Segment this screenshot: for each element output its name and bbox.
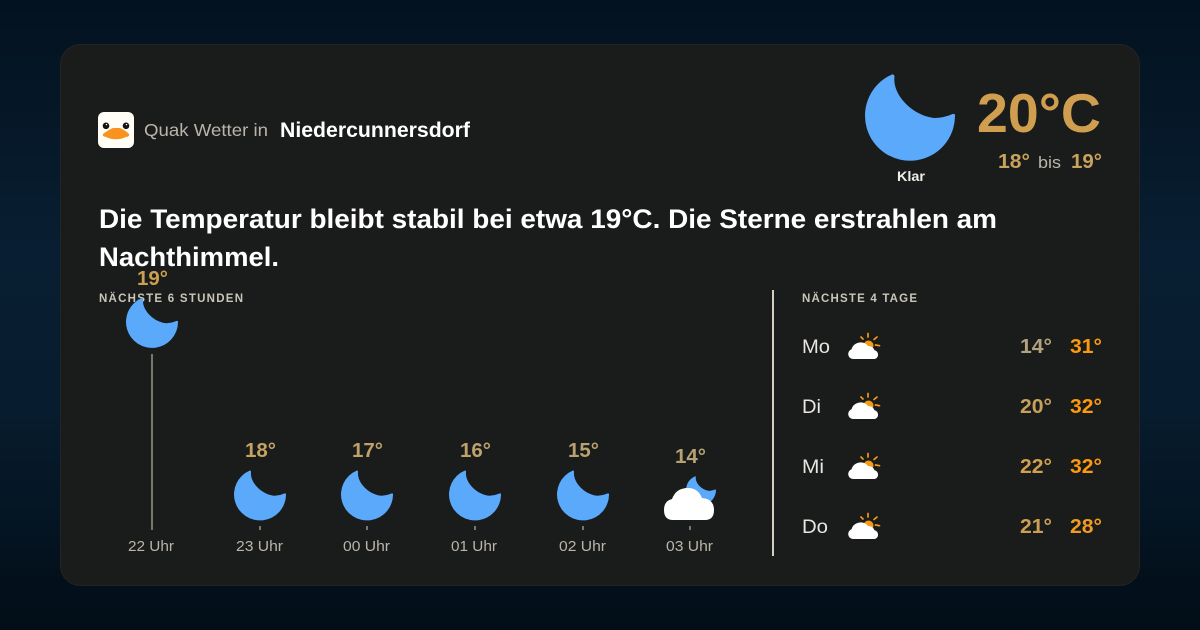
icon: current moon — [865, 74, 955, 161]
condition label: Klar — [897, 168, 926, 184]
temperature range — [998, 151, 1102, 173]
headline summary: Nachthimmel. — [99, 242, 279, 272]
hour 03: 03 Uhr — [666, 539, 713, 555]
location name: Niedercunnersdorf — [280, 119, 471, 142]
temperature range: 19° — [1071, 151, 1102, 173]
heading: next 4 days: NÄCHSTE 4 TAGE — [802, 292, 917, 305]
day: Tuesday: Di — [802, 397, 821, 418]
hour 22: 22 Uhr — [128, 539, 174, 555]
hour 03 — [664, 446, 716, 555]
day: Monday: 14° — [1020, 336, 1052, 358]
hour 00 — [341, 440, 393, 555]
heading: next 6 hours: NÄCHSTE 6 STUNDEN — [99, 292, 243, 305]
hour 02: 02 Uhr — [559, 539, 606, 555]
brand label: Quak Wetter in — [144, 120, 268, 140]
day: Thursday — [802, 514, 1102, 539]
headline summary — [99, 204, 997, 272]
day: Monday: Mo — [802, 337, 830, 358]
temperature range: bis — [1038, 153, 1061, 172]
hour 01: 01 Uhr — [451, 539, 497, 555]
hour 01: 16° — [460, 440, 491, 462]
day: Wednesday: 22° — [1020, 456, 1052, 478]
day: Thursday: 21° — [1020, 516, 1052, 538]
hour 23: 18° — [245, 440, 276, 462]
headline summary: Die Temperatur bleibt stabil bei etwa 19°C. Die Sterne erstrahlen am — [99, 204, 997, 234]
day: Tuesday — [802, 394, 1102, 419]
hour 00: 00 Uhr — [343, 539, 390, 555]
day: Tuesday: 20° — [1020, 396, 1052, 418]
day: Wednesday: Mi — [802, 457, 824, 478]
day: Thursday: 28° — [1070, 516, 1102, 538]
logo: duck icon — [98, 112, 134, 148]
hour 22 — [126, 268, 178, 555]
hour 03: 14° — [675, 446, 706, 468]
hour 02: 15° — [568, 440, 599, 462]
hour 01 — [449, 440, 501, 555]
divider — [772, 290, 774, 556]
chart: hourly forecast — [126, 268, 716, 555]
day: Wednesday — [802, 454, 1102, 479]
day: Monday — [802, 334, 1102, 359]
hour 00: 17° — [352, 440, 383, 462]
day: Thursday: Do — [802, 517, 828, 538]
day: Wednesday: 32° — [1070, 456, 1102, 478]
list: daily forecast — [802, 334, 1102, 539]
temperature range: 18° — [998, 151, 1030, 173]
hour 23 — [234, 440, 286, 555]
current temperature: 20°C — [977, 82, 1101, 144]
hour 23: 23 Uhr — [236, 539, 283, 555]
panel: weather card — [60, 44, 1140, 586]
day: Monday: 31° — [1070, 336, 1102, 358]
day: Tuesday: 32° — [1070, 396, 1102, 418]
hour 02 — [557, 440, 609, 555]
hour 22: 19° — [137, 268, 168, 290]
